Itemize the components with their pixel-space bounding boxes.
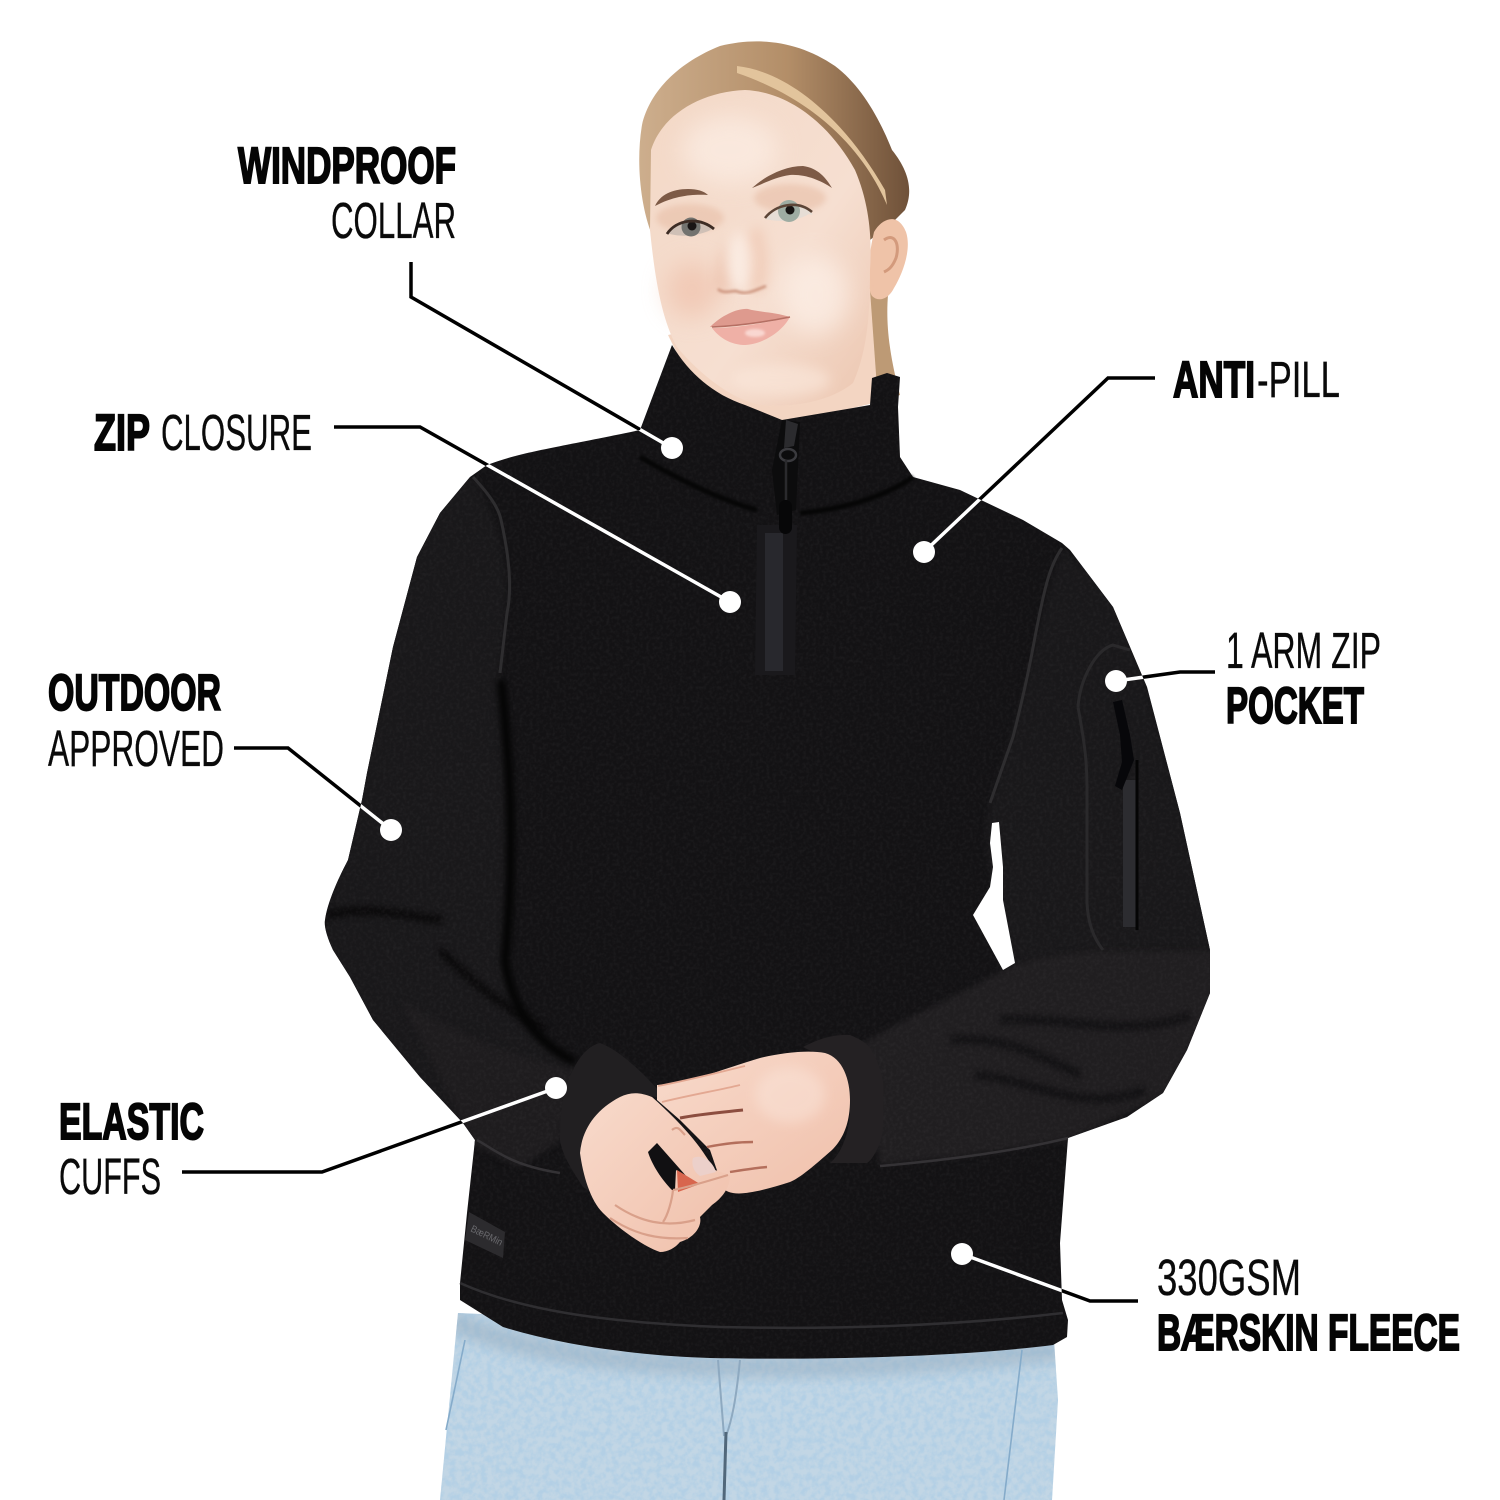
callout: zip closure <box>94 404 741 613</box>
right cuff <box>803 1035 884 1163</box>
right eye <box>765 200 813 222</box>
callout: anti-pill: ANTI <box>1173 351 1255 408</box>
lips <box>710 309 790 345</box>
callout: anti-pill: -PILL <box>1257 351 1340 408</box>
callout: anti-pill <box>913 351 1340 563</box>
callout: windproof collar: WINDPROOF <box>238 137 456 194</box>
left cuff <box>560 1043 660 1193</box>
fleece body <box>320 340 1220 1365</box>
hands <box>580 1052 850 1252</box>
left eye <box>667 218 714 236</box>
right hand <box>657 1052 850 1193</box>
eye sockets <box>656 204 724 232</box>
blond strand <box>737 66 887 205</box>
gap between hands <box>648 1143 687 1190</box>
callout: elastic cuffs: ELASTIC <box>59 1093 204 1150</box>
callout: zip closure: ZIP <box>94 404 150 461</box>
sleeve pocket zip <box>1078 645 1137 950</box>
callout: arm zip pocket: 1 ARM ZIP <box>1226 622 1381 679</box>
hair <box>639 41 909 240</box>
callout: outdoor approved <box>48 664 402 841</box>
collar seam <box>640 457 913 513</box>
model photo illustration <box>320 41 1220 1500</box>
eyebrows <box>655 166 832 206</box>
callout: outdoor approved: APPROVED <box>48 720 224 777</box>
logo tab: BæRMin <box>469 1224 504 1249</box>
callout: arm zip pocket <box>1105 632 1380 724</box>
arm and side seams <box>473 477 1062 803</box>
jeans <box>430 1300 1070 1500</box>
ear <box>868 219 908 299</box>
callout: elastic cuffs <box>59 1077 567 1205</box>
face <box>650 66 887 406</box>
callout: arm zip pocket: POCKET <box>1226 677 1364 734</box>
ponytail and back hair <box>865 290 900 405</box>
bottom hem stitch <box>460 1283 1063 1328</box>
nose <box>714 225 768 293</box>
callout: windproof collar <box>238 137 683 459</box>
left hand <box>580 1093 730 1252</box>
callout: zip closure: CLOSURE <box>161 404 312 461</box>
callout: baerskin fleece <box>951 1243 1460 1361</box>
callout: elastic cuffs: CUFFS <box>59 1148 161 1205</box>
fleece shading <box>320 340 1220 1365</box>
neck <box>668 290 878 425</box>
callout: windproof collar: COLLAR <box>331 192 456 249</box>
callout: outdoor approved: OUTDOOR <box>48 664 221 721</box>
callout: baerskin fleece: 330GSM <box>1157 1249 1301 1306</box>
logo tab <box>465 1212 505 1258</box>
central zip <box>755 420 800 675</box>
sleeve lower fold line <box>477 1138 1068 1173</box>
body and arm gap <box>973 822 1015 970</box>
thumbnail <box>692 1157 716 1176</box>
